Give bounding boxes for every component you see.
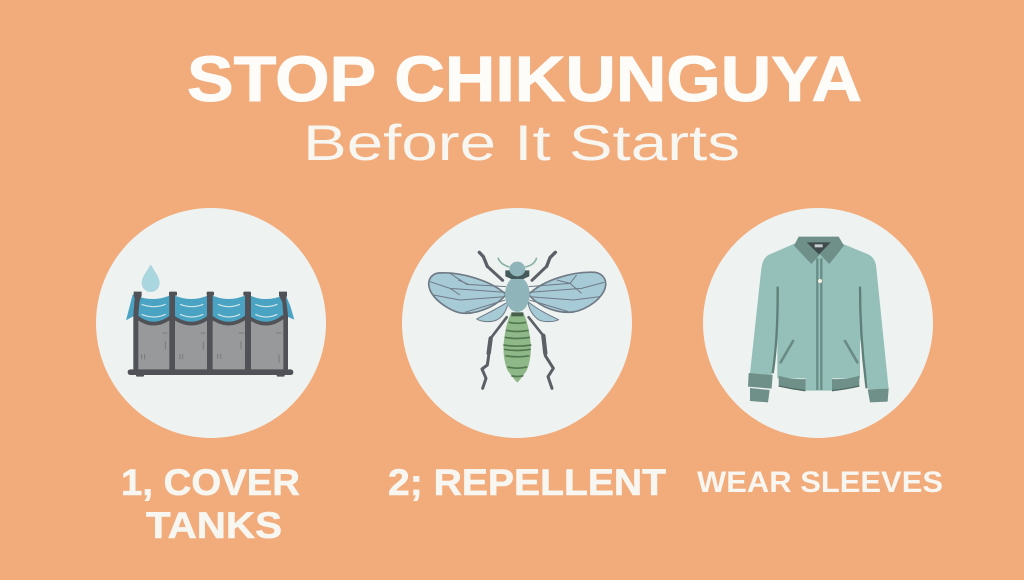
icon circle: mosquito background (402, 208, 632, 438)
icon circle: tanks background (96, 208, 326, 438)
legs (479, 252, 555, 388)
button (818, 279, 822, 283)
panel: repellent (388, 208, 666, 503)
label: step 3: WEAR SLEEVES (697, 466, 943, 499)
subtitle: Before It Starts (303, 115, 740, 171)
zipper (817, 258, 821, 390)
label: step 2: 2; REPELLENT (388, 462, 666, 503)
posts (128, 292, 293, 377)
dark scallops (136, 316, 284, 324)
shirt inside collar (807, 242, 831, 254)
pockets (781, 341, 857, 362)
wings (429, 272, 606, 322)
antennae (498, 258, 537, 267)
icon: mosquito (429, 252, 606, 388)
label: step 1 second line: TANKS (146, 505, 282, 546)
panel: cover tanks (96, 208, 326, 546)
icon circle: jacket background (703, 208, 933, 438)
label: step 1: 1, COVER (121, 462, 300, 503)
collar band (794, 237, 844, 264)
abdomen (503, 313, 531, 383)
blue covers (126, 294, 294, 324)
icon: water drop (142, 264, 160, 292)
thorax and head (505, 277, 530, 312)
sleeve seams (773, 287, 867, 388)
panel: wear sleeves (697, 208, 943, 499)
cuffs and hem (748, 373, 889, 402)
tank bodies (136, 317, 284, 370)
icon: jacket (748, 237, 889, 402)
title: STOP CHIKUNGUYA (187, 43, 862, 115)
jacket body (750, 243, 889, 391)
icon: covered water tanks (126, 264, 294, 377)
